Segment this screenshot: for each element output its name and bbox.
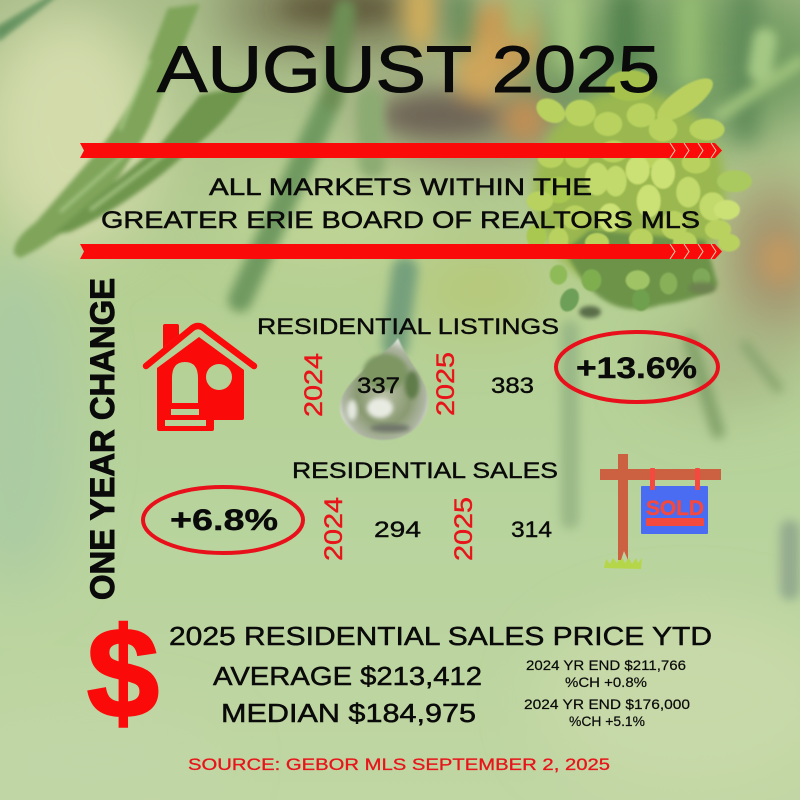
price heading: 2025 RESIDENTIAL SALES PRICE YTD (169, 621, 712, 651)
pine bud (527, 70, 752, 318)
listings heading: RESIDENTIAL LISTINGS (257, 314, 559, 339)
subtitle (101, 174, 700, 234)
callout: listings change (556, 332, 718, 402)
average comparison note (526, 657, 686, 690)
median comparison note (524, 696, 690, 729)
bottom arrow banner (80, 244, 722, 259)
listings 2025 label: 2025 (432, 352, 460, 416)
icon: sold sign (600, 454, 721, 569)
sales 2025 label: 2025 (450, 497, 478, 561)
average comparison note: %CH +0.8% (565, 674, 647, 690)
callout: sales change: +6.8% (170, 504, 278, 537)
source line: SOURCE: GEBOR MLS SEPTEMBER 2, 2025 (188, 755, 610, 774)
water drop (340, 338, 428, 440)
sales 2024 label: 2024 (320, 497, 348, 561)
callout: sales change (143, 487, 303, 553)
vertical heading: one year change: ONE YEAR CHANGE (84, 278, 122, 600)
listings 2024 value: 337 (357, 373, 400, 398)
subtitle: ALL MARKETS WITHIN THE (209, 174, 592, 201)
sales 2025 value: 314 (511, 517, 552, 542)
title: AUGUST 2025 (157, 32, 660, 106)
callout: listings change: +13.6% (576, 352, 697, 385)
median comparison note: %CH +5.1% (569, 713, 645, 729)
listings 2025 value: 383 (491, 373, 534, 398)
average price: AVERAGE $213,412 (213, 661, 482, 691)
listings 2024 label: 2024 (300, 353, 328, 417)
icon: sold sign: SOLD (646, 497, 704, 520)
average comparison note: 2024 YR END $211,766 (526, 657, 686, 673)
sales heading: RESIDENTIAL SALES (292, 458, 558, 483)
icon: dollar sign: $ (87, 602, 159, 745)
median price: MEDIAN $184,975 (221, 698, 476, 728)
big needles (0, 0, 250, 258)
top arrow banner (80, 143, 722, 158)
subtitle: GREATER ERIE BOARD OF REALTORS MLS (101, 207, 700, 234)
sales 2024 value: 294 (374, 517, 421, 542)
median comparison note: 2024 YR END $176,000 (524, 696, 690, 712)
icon: red house (146, 324, 254, 431)
